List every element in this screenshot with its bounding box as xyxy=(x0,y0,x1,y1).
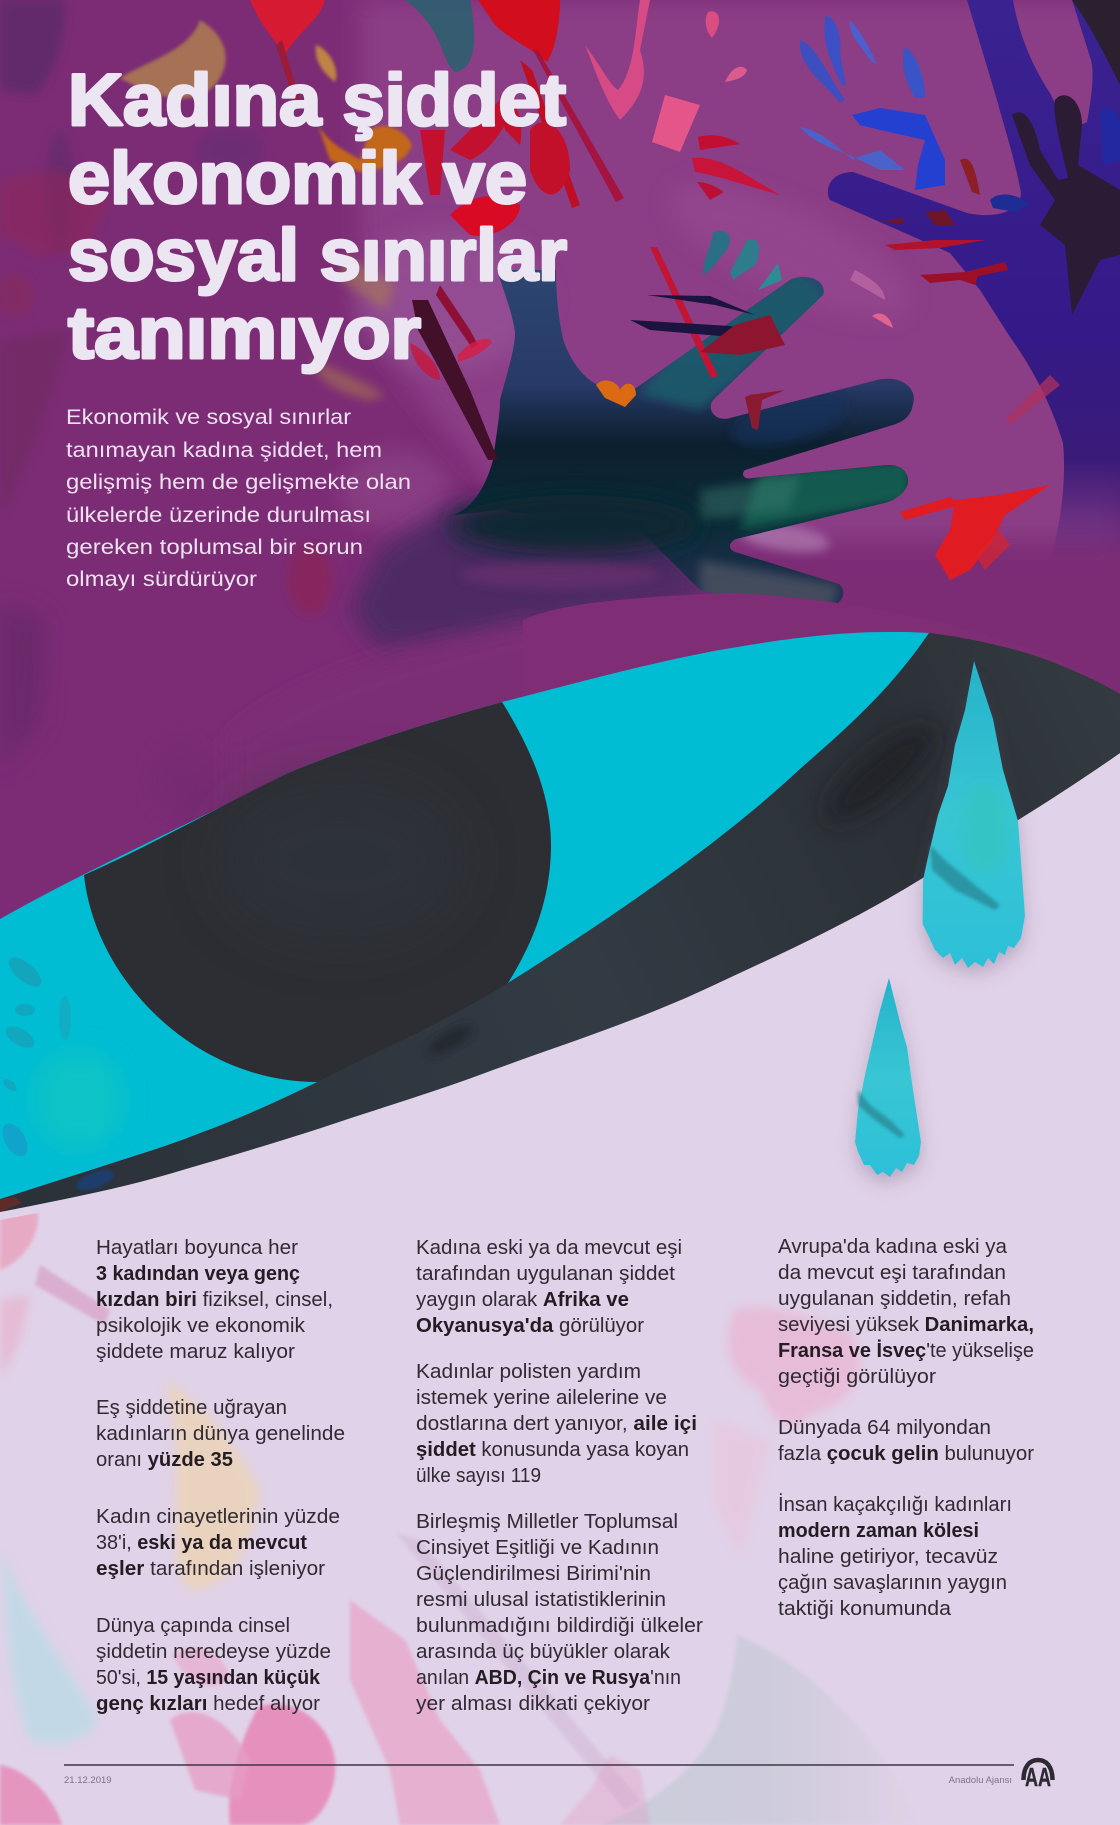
iris left watercolor spots xyxy=(0,952,123,1161)
paragraph: 3 kadından biri: Hayatları boyunca her xyxy=(96,1237,298,1259)
paragraph: BM birimi: yer alması dikkati çekiyor xyxy=(416,1693,650,1715)
icon: large teardrop xyxy=(923,661,1025,968)
paragraph: cinayetler: eşler tarafından işleniyor xyxy=(96,1558,325,1580)
blue handprint xyxy=(824,15,846,85)
iris xyxy=(0,632,929,1199)
paragraph: BM birimi: resmi ulusal istatistiklerinin xyxy=(416,1589,666,1611)
subtitle text block: gelişmiş hem de gelişmekte olan xyxy=(66,470,411,494)
panel: footer xyxy=(64,1760,1052,1792)
red splash bottom right xyxy=(900,485,1050,580)
paragraph: insan kaçakçılığı: çağın savaşlarının yaygın xyxy=(778,1572,1007,1594)
title: Kadına şiddet xyxy=(68,60,566,141)
dark palm blending into smoke xyxy=(450,495,700,555)
icon: hand smoke underlay xyxy=(350,505,700,650)
paragraph: cinayetler: Kadın cinayetlerinin yüzde xyxy=(96,1506,340,1528)
paragraph: insan kaçakçılığı: İnsan kaçakçılığı kadınları xyxy=(778,1493,1012,1516)
dark band eyelid xyxy=(0,633,1120,1212)
big red top splash xyxy=(478,0,560,62)
paragraph: çocuk gelin xyxy=(778,1417,1034,1465)
paragraph: çocuk gelin: Dünyada 64 milyondan xyxy=(778,1417,991,1439)
panel: purple sweep above the eye xyxy=(230,593,1120,900)
paragraph: cinayetler: 38'i, eski ya da mevcut xyxy=(96,1532,307,1554)
paragraph: 3 kadından biri: psikolojik ve ekonomik xyxy=(96,1315,306,1337)
paragraph: cinsel şiddet xyxy=(96,1615,331,1715)
paragraph: Avrupa: Fransa ve İsveç'te yükselişe xyxy=(778,1339,1034,1362)
pink splash centre-bottom xyxy=(350,1600,500,1825)
paragraph: insan kaçakçılığı: modern zaman kölesi xyxy=(778,1520,979,1542)
paragraph: Afrika ve Okyanusya xyxy=(416,1237,682,1337)
pale blue-grey stain xyxy=(600,1635,920,1825)
subtitle text block: ülkelerde üzerinde durulması xyxy=(66,503,371,527)
paragraph: Avrupa: da mevcut eşi tarafından xyxy=(778,1262,1006,1284)
paragraph: BM birimi: Güçlendirilmesi Birimi'nin xyxy=(416,1563,651,1585)
paragraph: BM birimi: Birleşmiş Milletler Toplumsal xyxy=(416,1511,678,1533)
red dabs xyxy=(698,135,740,150)
ochre brush marks xyxy=(120,20,226,98)
pink marks xyxy=(585,0,650,120)
paragraph: 3 kadından biri: kızdan biri fiziksel, cinsel, xyxy=(96,1289,333,1311)
red cluster behind title xyxy=(420,90,520,195)
title xyxy=(68,60,567,374)
subtitle text block: tanımayan kadına şiddet, hem xyxy=(66,438,382,462)
paragraph: Afrika ve Okyanusya: yaygın olarak Afrika ve xyxy=(416,1289,629,1311)
paragraph: Avrupa: geçtiği görülüyor xyxy=(778,1366,936,1388)
paragraph: cinsel şiddet: 50'si, 15 yaşından küçük xyxy=(96,1667,321,1689)
paragraph: BM birimi: Cinsiyet Eşitliği ve Kadının xyxy=(416,1537,659,1559)
paragraph: Afrika ve Okyanusya: Kadına eski ya da mevcut eşi xyxy=(416,1237,682,1259)
subtitle text block: olmayı sürdürüyor xyxy=(66,567,257,591)
icon: pale paint between fingers xyxy=(739,519,831,557)
dark handprint xyxy=(1012,95,1120,315)
band smudges xyxy=(812,713,948,837)
teal stain left xyxy=(2,1553,98,1745)
paragraph: cinsel şiddet: Dünya çapında cinsel xyxy=(96,1615,290,1637)
panel: lower watercolour background xyxy=(0,1210,920,1825)
icon: right blue hand silhouette xyxy=(828,0,1120,640)
paragraph: aile içi şiddet: istemek yerine ailelerine ve xyxy=(416,1387,667,1409)
paragraph: BM birimi: anılan ABD, Çin ve Rusya'nın xyxy=(416,1667,681,1689)
paragraph: Avrupa xyxy=(778,1236,1034,1388)
title: tanımıyor xyxy=(68,293,421,374)
paragraph: cinsel şiddet: şiddetin neredeyse yüzde xyxy=(96,1641,331,1663)
paragraph: aile içi şiddet: şiddet konusunda yasa koyan xyxy=(416,1439,689,1461)
paragraph: Avrupa: Avrupa'da kadına eski ya xyxy=(778,1236,1008,1258)
red top left splash xyxy=(250,0,325,55)
subtitle text block: gereken toplumsal bir sorun xyxy=(66,535,363,559)
icon: eye xyxy=(0,632,1120,1212)
icon: red and coloured paint splatters xyxy=(250,0,1060,580)
date: 21.12.2019 xyxy=(64,1775,112,1786)
subtitle text block xyxy=(66,405,411,591)
paragraph: aile içi şiddet: Kadınlar polisten yardım xyxy=(416,1361,641,1383)
panel: middle column text xyxy=(416,1237,703,1715)
subtitle text block: Ekonomik ve sosyal sınırlar xyxy=(66,405,351,429)
panel: hero background xyxy=(0,0,1120,1000)
paragraph: Afrika ve Okyanusya: Okyanusya'da görülüyor xyxy=(416,1315,644,1337)
paragraph: insan kaçakçılığı: taktiği konumunda xyxy=(778,1598,952,1620)
icon: Anadolu Ajansı logo: AA xyxy=(1025,1762,1051,1792)
icon: central hand silhouette xyxy=(450,270,914,610)
paragraph: yüzde 35: oranı yüzde 35 xyxy=(96,1449,233,1471)
paragraph: Afrika ve Okyanusya: tarafından uygulanan şiddet xyxy=(416,1263,675,1285)
paragraph: yüzde 35: kadınların dünya genelinde xyxy=(96,1423,345,1445)
yellow stain xyxy=(165,1380,260,1590)
pink splash right top xyxy=(728,1307,860,1426)
paragraph: aile içi şiddet xyxy=(416,1361,697,1487)
paragraph: aile içi şiddet: ülke sayısı 119 xyxy=(416,1465,541,1487)
paragraph: yüzde 35: Eş şiddetine uğrayan xyxy=(96,1397,287,1419)
teal finger tint xyxy=(640,270,830,410)
paragraph: yüzde 35 xyxy=(96,1397,345,1471)
title: ekonomik ve xyxy=(68,138,527,219)
orange splash xyxy=(318,125,412,172)
paragraph: 3 kadından biri: 3 kadından veya genç xyxy=(96,1263,300,1285)
title: sosyal sınırlar xyxy=(68,215,567,296)
paragraph: insan kaçakçılığı xyxy=(778,1493,1012,1620)
icon: small teardrop xyxy=(855,978,921,1177)
purple smoke wisps xyxy=(460,562,660,588)
paragraph: aile içi şiddet: dostlarına dert yanıyor, aile içi xyxy=(416,1413,697,1435)
teal top stroke xyxy=(405,0,474,72)
paragraph: BM birimi xyxy=(416,1511,703,1715)
red streaks on blue hand xyxy=(885,240,985,250)
orange heart xyxy=(596,381,636,407)
dark red branches xyxy=(412,300,498,460)
paragraph: cinsel şiddet: genç kızları hedef alıyor xyxy=(96,1693,320,1715)
panel: right column text xyxy=(778,1236,1034,1620)
paragraph: Avrupa: uygulanan şiddetin, refah xyxy=(778,1288,1011,1310)
icon: Anadolu Ajansı logo xyxy=(1024,1760,1052,1792)
red-pink top-left stain xyxy=(0,1210,38,1270)
dark top-right finger xyxy=(1072,0,1120,85)
paragraph: Avrupa: seviyesi yüksek Danimarka, xyxy=(778,1314,1034,1336)
credit: Anadolu Ajansı xyxy=(949,1775,1012,1786)
dark smudges on left xyxy=(0,0,65,95)
panel: left column text xyxy=(96,1237,345,1715)
paragraph: BM birimi: arasında üç büyükler olarak xyxy=(416,1641,671,1663)
paragraph: cinayetler xyxy=(96,1506,340,1580)
pink splash left-bottom xyxy=(229,1704,335,1825)
paragraph: 3 kadından biri xyxy=(96,1237,333,1363)
teal and red scribbles over hand xyxy=(703,231,730,275)
paragraph: 3 kadından biri: şiddete maruz kalıyor xyxy=(96,1341,295,1363)
pupil xyxy=(84,702,551,1082)
paragraph: BM birimi: bulunmadığını bildirdiği ülkeler xyxy=(416,1615,703,1637)
icon: lower lilac mask under the eye xyxy=(0,753,1120,1220)
paragraph: insan kaçakçılığı: haline getiriyor, tecavüz xyxy=(778,1546,998,1568)
paragraph: çocuk gelin: fazla çocuk gelin bulunuyor xyxy=(778,1443,1034,1465)
lighter brushed area xyxy=(360,0,1120,540)
